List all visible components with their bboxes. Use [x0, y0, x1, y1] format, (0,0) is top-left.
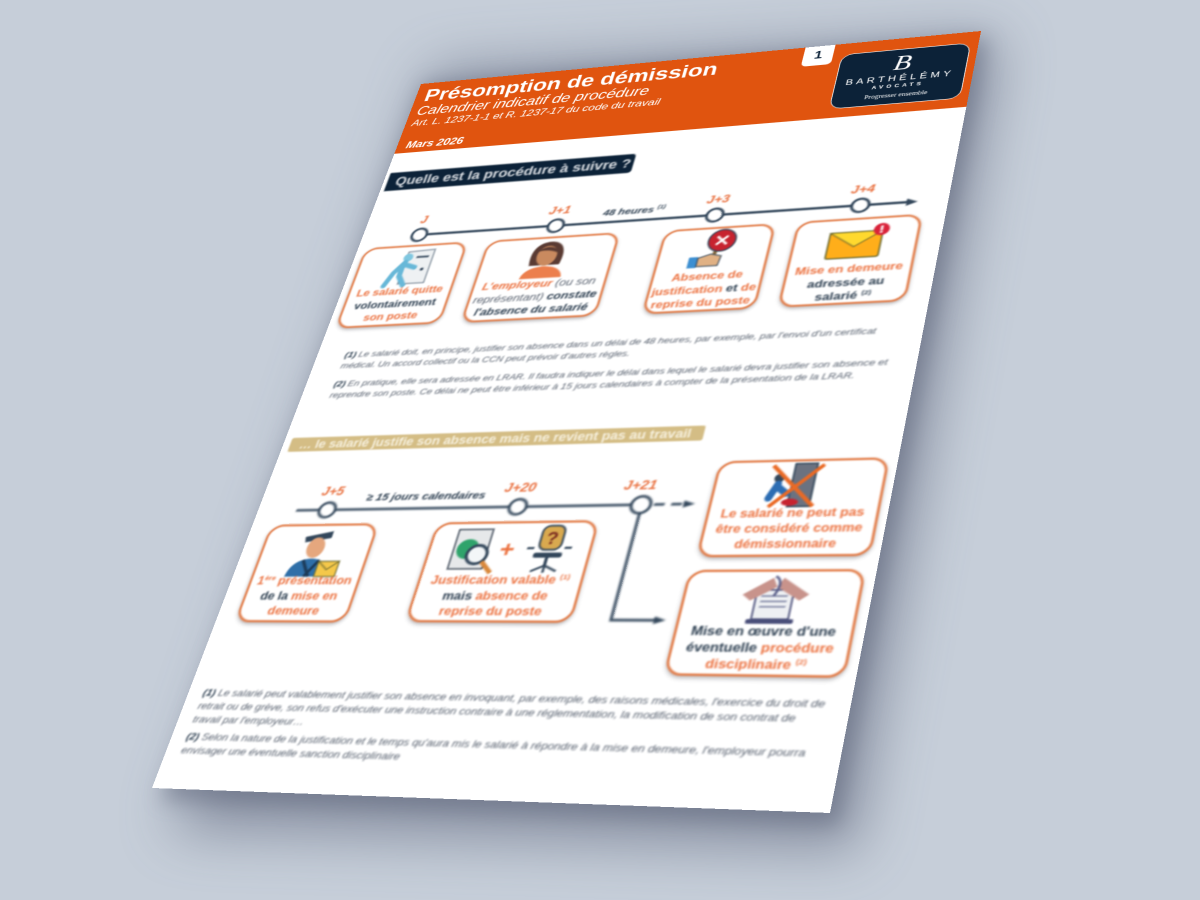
label J+1: J+1	[547, 204, 573, 217]
outcome text: éventuelle procédure	[684, 640, 835, 656]
step text: reprise du poste	[649, 295, 751, 311]
title: Présomption de démission	[421, 59, 720, 105]
footnote 1: travail par l'employeur…	[191, 713, 306, 727]
page number badge	[801, 45, 836, 67]
step text: Absence de	[670, 269, 744, 284]
step text: représentant) constate	[471, 288, 598, 306]
step text	[794, 260, 904, 303]
footnote 2: envisager une éventuelle sanction disciplinaire	[180, 744, 402, 762]
legal reference: Art. L. 1237-1-1 et R. 1237-17 du code du travail	[410, 96, 662, 128]
date: Mars 2026	[404, 135, 465, 150]
step text: Justification valable (1)	[429, 573, 571, 587]
footnote 1: (1) Le salarié doit, en principe, justifier son absence dans un délai de 48 heures, par exemple, par l'envoi d'un certificat	[343, 326, 877, 359]
step text: son poste	[362, 310, 419, 323]
step text: adressée au	[806, 275, 886, 290]
footnote 2: (2) En pratique, elle sera adressée en LRAR. Il faudra indiquer le délai dans lequel le salarié devra justifier son absence et	[332, 357, 889, 389]
outcome text: Mise en œuvre d'une	[690, 624, 837, 639]
label J+5: J+5	[320, 484, 347, 498]
logo name: BARTHÉLÉMY	[845, 69, 955, 87]
footnote 1: retrait ou de grève, son refus d'exécuter une instruction contraire à une réglementation, la modification de son contrat de	[196, 700, 797, 724]
step box: justification valable	[405, 520, 600, 623]
step text: Mise en demeure	[794, 260, 904, 278]
subtitle: Calendrier indicatif de procédure	[415, 84, 651, 118]
page number badge: 1	[813, 49, 824, 62]
outcome text: disciplinaire (2)	[704, 657, 808, 672]
label J+4: J+4	[850, 182, 876, 196]
step text: 1ère présentation	[255, 574, 354, 587]
footnote 1: (1) Le salarié peut valablement justifier son absence en invoquant, par exemple, des raisons médicales, l'exercice du droit de	[201, 687, 826, 710]
label J+21: J+21	[622, 478, 659, 492]
label J+20: J+20	[503, 480, 538, 495]
step box: salarié quitte	[335, 242, 468, 329]
icon: hand holding stop sign	[685, 228, 738, 270]
footnotes block 2	[180, 687, 826, 762]
icon: postman with letter	[283, 530, 342, 578]
icon: empty office chair: ?	[544, 529, 561, 548]
logo	[829, 43, 971, 109]
icon: man leaving through door	[379, 248, 437, 290]
step text: de la mise en	[258, 589, 340, 602]
step text	[649, 269, 758, 311]
icon: empty office chair	[526, 524, 574, 574]
footnotes block 1	[328, 326, 890, 400]
outcome text: Le salarié ne peut pas	[719, 506, 866, 521]
outcome text	[714, 506, 866, 551]
outcome text	[684, 556, 837, 672]
section heading: gold banner: … le salarié justifie son absence mais ne revient pas au travail	[297, 427, 693, 451]
footnote 1: médical. Un accord collectif ou la CCN peut prévoir d'autres règles.	[339, 348, 632, 370]
icon: contract and hands	[702, 556, 810, 626]
outcome box: disciplinary procedure	[663, 569, 866, 678]
step text: justification et de	[650, 281, 758, 298]
plus sign: +	[496, 536, 519, 562]
step box: 1re présentation	[234, 523, 379, 623]
step text: reprise du poste	[437, 605, 544, 618]
footnote 1	[191, 687, 826, 728]
step text	[429, 573, 572, 618]
step box: mise en demeure	[777, 214, 923, 308]
delay label 48 hours: 48 heures (1)	[602, 203, 667, 218]
delay label 15 days: ≥ 15 jours calendaires	[365, 490, 487, 503]
step text: volontairement	[353, 296, 438, 311]
logo subname: AVOCATS	[871, 80, 925, 90]
step text: Le salarié quitte	[355, 284, 445, 299]
footnote 2: (2) Selon la nature de la justification et le temps qu'aura mis le salarié à répondre à la mise en demeure, l'employeur pourra	[185, 731, 807, 759]
document page	[152, 31, 981, 813]
header band	[394, 31, 981, 154]
step text	[255, 574, 354, 617]
logo monogram: B	[891, 51, 914, 75]
icon: document and magnifier	[445, 527, 496, 576]
step text: demeure	[266, 605, 321, 617]
step text: mais absence de	[441, 589, 550, 602]
outcome text: être considéré comme	[714, 522, 864, 536]
label J: J	[419, 214, 430, 226]
step text: salarié (2)	[813, 289, 872, 303]
section heading: procedure: Quelle est la procédure à suivre ?	[393, 157, 633, 188]
outcome box: not resigning	[696, 457, 890, 557]
step box: employeur constate	[460, 232, 621, 323]
label J+3: J+3	[705, 193, 731, 206]
step text: L'employeur (ou son	[481, 275, 597, 293]
logo tagline: Progresser ensemble	[863, 89, 928, 101]
timeline 2 with branches	[294, 494, 696, 626]
icon: woman employer	[518, 240, 565, 280]
timeline 1	[409, 196, 918, 243]
icon: crossed out person at door	[762, 461, 828, 510]
step text	[353, 284, 445, 323]
step text	[471, 275, 598, 318]
footnote 2: reprendre son poste. Ce délai ne peut être inférieur à 15 jours calendaires à compter de la présentation de la LRAR.	[328, 370, 856, 400]
step text: l'absence du salarié	[472, 301, 589, 318]
icon: envelope with alert	[823, 222, 892, 261]
outcome text: démissionnaire	[733, 538, 837, 551]
step box: absence de justification	[641, 223, 776, 314]
